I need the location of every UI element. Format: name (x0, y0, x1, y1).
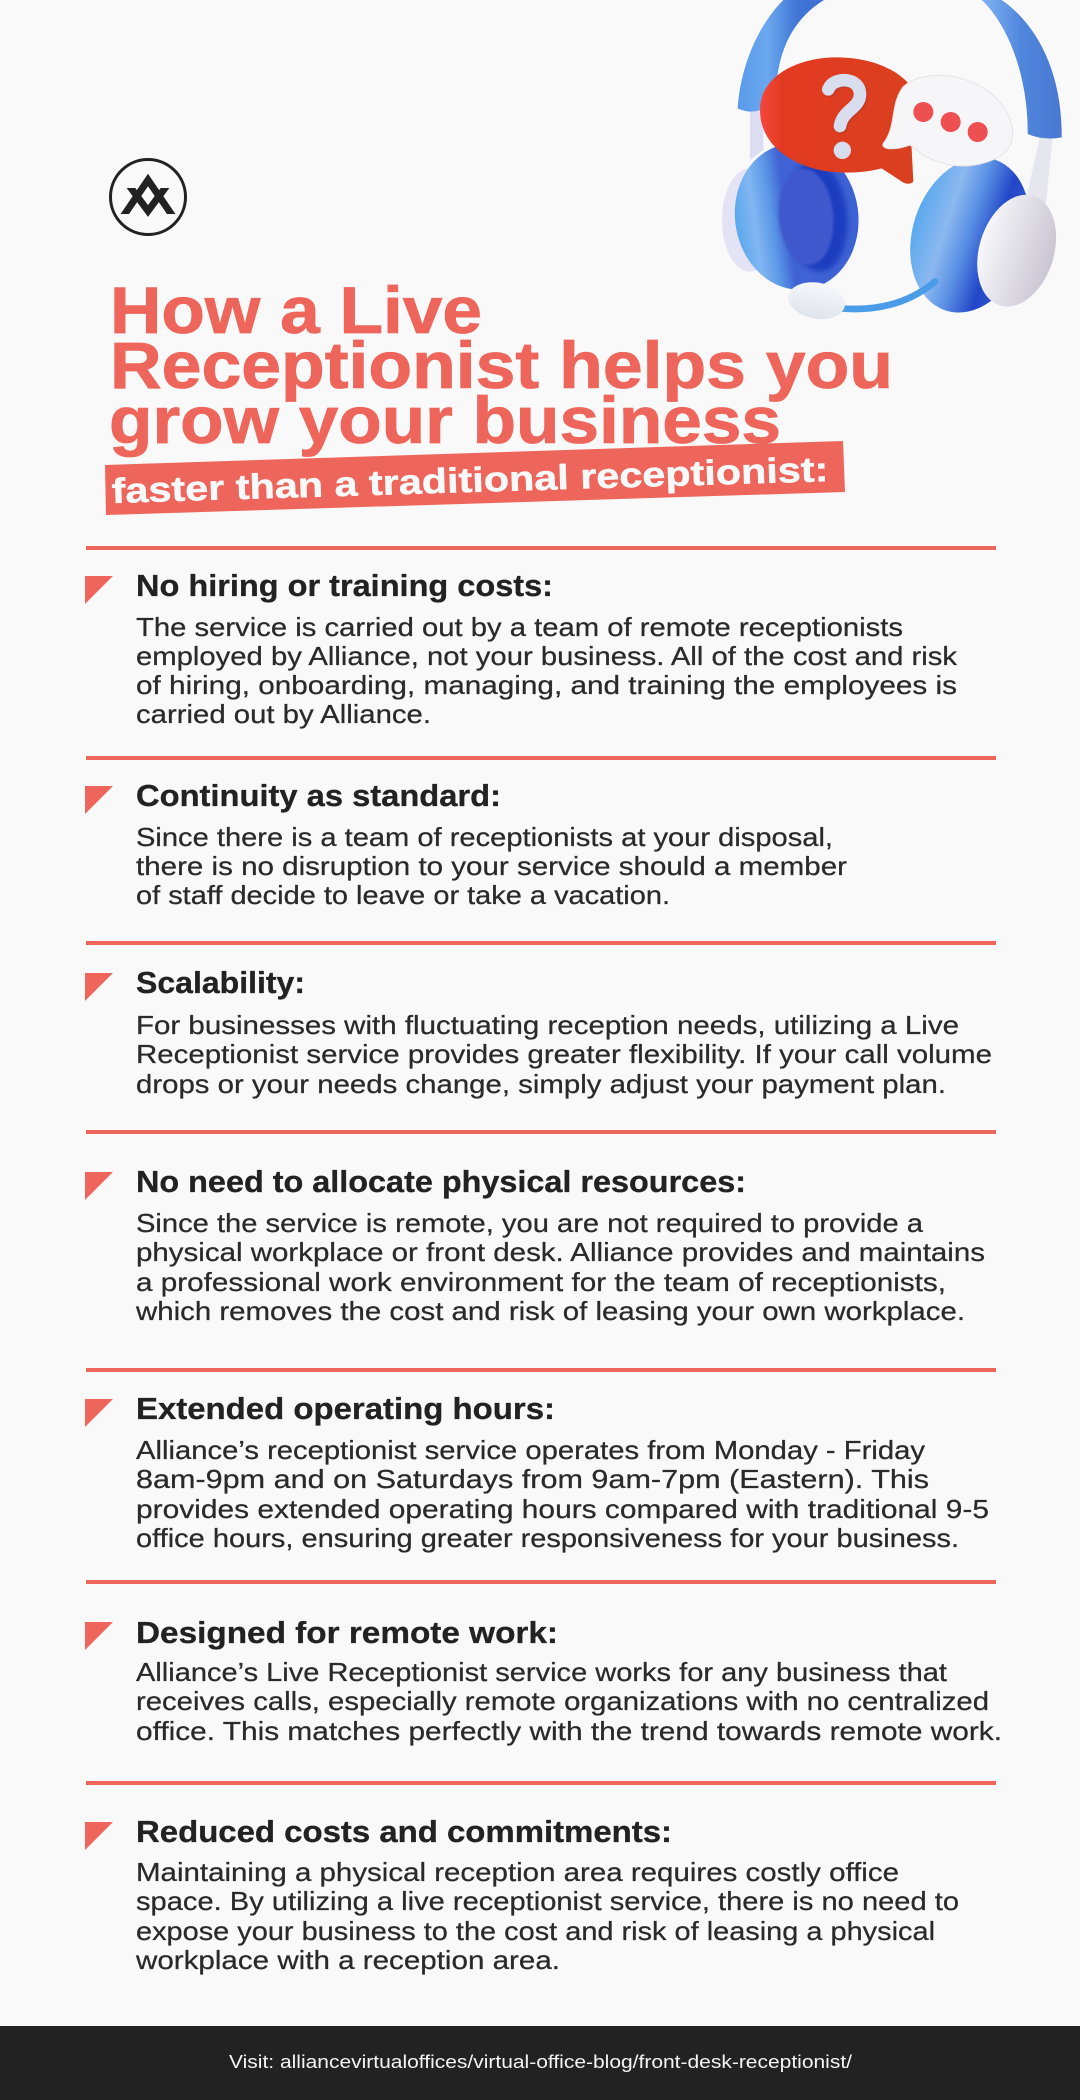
body text (136, 612, 958, 729)
section: continuity as standard (85, 756, 996, 910)
body text (135, 1208, 985, 1326)
body text: of hiring, onboarding, managing, and training the employees is (136, 670, 957, 700)
body text: Receptionist service provides greater flexibility. If your call volume (136, 1039, 992, 1069)
left ear cup (725, 135, 868, 298)
section: reduced costs and commitments (85, 1781, 996, 1975)
body text (135, 1857, 959, 1975)
body text: drops or your needs change, simply adjust your payment plan. (136, 1069, 946, 1099)
body text: Alliance’s Live Receptionist service works for any business that (136, 1657, 948, 1687)
headband right (982, 0, 1062, 138)
marker (85, 1172, 113, 1200)
left ear back plate (722, 168, 778, 272)
illustration: headset with speech bubbles (722, 0, 1069, 328)
question mark (828, 80, 861, 159)
body text: a professional work environment for the team of receptionists, (136, 1267, 946, 1297)
body text: provides extended operating hours compared with traditional 9-5 (136, 1494, 989, 1524)
logo (110, 160, 186, 234)
subtitle banner: faster than a traditional receptionist: (111, 450, 829, 511)
body text (136, 822, 847, 910)
section: designed for remote work (85, 1580, 1002, 1746)
body text (136, 1657, 1002, 1746)
marker (85, 1399, 113, 1427)
body text: employed by Alliance, not your business. All of the cost and risk (136, 641, 958, 671)
marker (85, 1622, 113, 1650)
heading: Designed for remote work: (136, 1616, 558, 1650)
microphone (785, 278, 848, 323)
heading: Scalability: (136, 966, 305, 1000)
body text: Alliance’s receptionist service operates from Monday - Friday (136, 1435, 925, 1465)
body text: 8am-9pm and on Saturdays from 9am-7pm (Eastern). This (136, 1464, 929, 1494)
body text: Maintaining a physical reception area requires costly office (136, 1857, 899, 1887)
body text: there is no disruption to your service should a member (136, 851, 847, 881)
body text: of staff decide to leave or take a vacation. (136, 880, 670, 910)
body text (136, 1435, 989, 1553)
body text: physical workplace or front desk. Alliance provides and maintains (136, 1237, 985, 1267)
title: How a Live (110, 273, 482, 347)
left ear shadow crescent (781, 159, 852, 274)
marker (85, 1822, 113, 1850)
microphone boom (840, 282, 935, 309)
body text: workplace with a reception area. (135, 1945, 560, 1975)
heading: No hiring or training costs: (136, 569, 553, 603)
marker (85, 786, 113, 814)
red question bubble (760, 57, 913, 184)
body text: Since the service is remote, you are not required to provide a (136, 1208, 924, 1238)
marker (85, 973, 113, 1001)
right ear cup (891, 142, 1049, 328)
footer (0, 2026, 1080, 2100)
heading: Reduced costs and commitments: (136, 1815, 672, 1849)
title (109, 273, 893, 457)
heading: Extended operating hours: (136, 1392, 555, 1426)
title: Receptionist helps you (110, 328, 893, 402)
footer: Visit: alliancevirtualoffices/virtual-office-blog/front-desk-receptionist/ (229, 2051, 853, 2072)
right ear plate (964, 185, 1069, 316)
section: scalability (85, 941, 996, 1099)
section: no need to allocate physical resources (85, 1130, 996, 1326)
body text: The service is carried out by a team of remote receptionists (136, 612, 903, 642)
body text: carried out by Alliance. (136, 699, 431, 729)
body text: receives calls, especially remote organizations with no centralized (136, 1686, 989, 1716)
body text: Since there is a team of receptionists at your disposal, (136, 822, 833, 852)
headband left (738, 0, 824, 112)
body text: space. By utilizing a live receptionist service, there is no need to (136, 1886, 959, 1916)
title: grow your business (109, 383, 781, 457)
subtitle banner (105, 441, 845, 515)
section: extended operating hours (85, 1368, 996, 1553)
heading: No need to allocate physical resources: (136, 1165, 746, 1199)
body text: expose your business to the cost and risk of leasing a physical (136, 1916, 935, 1946)
body text: which removes the cost and risk of leasing your own workplace. (135, 1296, 965, 1326)
body text: office hours, ensuring greater responsiveness for your business. (136, 1523, 959, 1553)
body text (136, 1010, 992, 1099)
white bubble (883, 75, 1013, 166)
body text: office. This matches perfectly with the trend towards remote work. (136, 1716, 1002, 1746)
marker (85, 576, 113, 604)
left stem (750, 110, 763, 160)
right stem (1025, 137, 1053, 203)
section: no hiring or training costs (85, 546, 996, 729)
body text: For businesses with fluctuating reception needs, utilizing a Live (136, 1010, 959, 1040)
left ear inner cushion (775, 166, 837, 267)
heading: Continuity as standard: (136, 779, 501, 813)
typing dots (913, 102, 988, 142)
